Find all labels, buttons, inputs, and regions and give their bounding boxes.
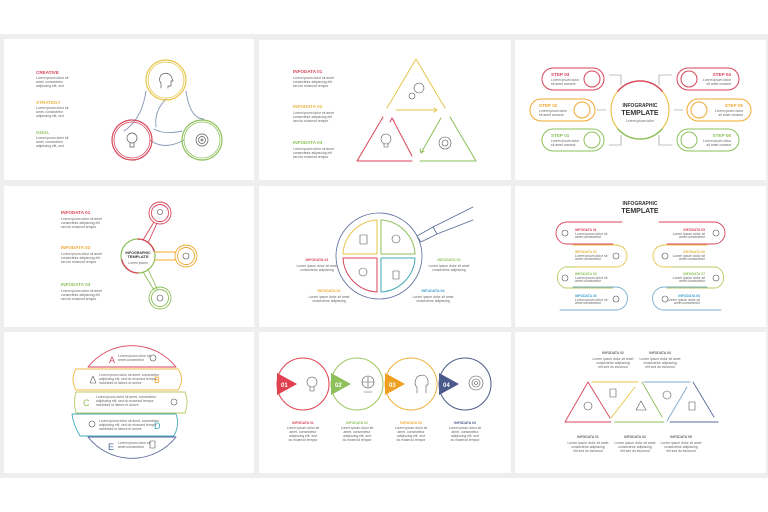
magnifier — [336, 207, 473, 299]
text: infodata 03: consectetur adipiscing elit — [293, 151, 332, 155]
band D: Lorem ipsum dolor sit amet, consectetur — [99, 419, 160, 423]
right snake: Lorem ipsum dolor sit — [668, 298, 700, 302]
labels: consectetur adipiscing — [416, 299, 450, 303]
top labels: Lorem ipsum dolor sit amet — [640, 357, 680, 361]
text: infodata 01 — [293, 69, 334, 88]
panel 5: magnifier — [259, 186, 511, 327]
step 05 — [687, 99, 751, 121]
text: infodata 01 — [61, 210, 102, 229]
text: creative: adipiscing elit, sed — [36, 84, 64, 88]
text: infodata 02: INFODATA 02 — [293, 104, 323, 109]
left snake — [556, 222, 628, 310]
band B — [73, 369, 182, 390]
step 03: do eiusmod tempor — [396, 438, 426, 442]
text: infodata 01: consectetur adipiscing elit — [293, 80, 332, 84]
bottom labels: elit sed do eiusmod — [573, 449, 603, 453]
text: infodata 03: INFODATA 03 — [293, 140, 323, 145]
central circle: Lorem ipsum dolor — [626, 119, 655, 123]
band E: Lorem ipsum dolor sit — [118, 441, 150, 445]
band C: incididunt ut labore et dolore — [96, 403, 139, 407]
step 04: Lorem ipsum dolor sit — [449, 426, 481, 430]
bottom labels: elit sed do eiusmod — [666, 449, 696, 453]
text: infodata 01: Lorem ipsum dolor sit amet — [61, 217, 102, 221]
band E: E — [108, 442, 114, 452]
bottom labels: INFODATA 01 — [577, 435, 599, 439]
step 01: Lorem ipsum dolor — [551, 139, 580, 143]
step 01: INFODATA 01 — [292, 421, 314, 425]
text: infodata 01: sed do eiusmod tempor — [293, 84, 329, 88]
connector arrows — [597, 75, 683, 145]
step 02 — [530, 99, 595, 121]
left snake: Lorem ipsum dolor sit — [575, 276, 607, 280]
bottom labels: elit sed do eiusmod — [620, 449, 650, 453]
band D — [72, 414, 178, 436]
labels: Lorem ipsum dolor sit amet — [309, 295, 349, 299]
step 02: INFODATA 02 — [346, 421, 368, 425]
top labels: consectetur adipiscing — [643, 361, 677, 365]
top labels — [593, 351, 680, 369]
hub circle: INFOGRAPHIC — [125, 251, 151, 255]
circle: target icon — [182, 120, 222, 160]
text: infodata 03: consectetur adipiscing elit — [61, 293, 100, 297]
right snake: Lorem ipsum dolor sit — [673, 254, 705, 258]
step 04: STEP 04 — [713, 72, 731, 77]
band B: adipiscing elit, sed do eiusmod tempor — [99, 377, 158, 381]
step 04: INFODATA 04 — [454, 421, 476, 425]
band A: A — [109, 355, 115, 365]
left snake: amet consectetur — [575, 279, 602, 283]
text: infodata 01: INFODATA 01 — [61, 210, 91, 215]
labels — [297, 258, 469, 303]
band A: amet consectetur — [118, 358, 145, 362]
step 03: 03 — [389, 383, 396, 389]
band C — [74, 392, 187, 413]
text: goal — [36, 130, 68, 148]
step 02: STEP 02 — [539, 103, 558, 108]
band C: adipiscing elit, sed do eiusmod tempor — [96, 399, 155, 403]
text: infodata 03: sed do eiusmod tempor — [293, 155, 329, 159]
step 01: do eiusmod tempor — [288, 438, 318, 442]
step 02: do eiusmod tempor — [342, 438, 372, 442]
band E: amet consectetur — [118, 445, 145, 449]
band D: adipiscing elit, sed do eiusmod tempor — [99, 423, 158, 427]
triangle top — [387, 59, 445, 112]
band C: C — [83, 398, 90, 408]
text: infodata 03: Lorem ipsum dolor sit amet — [293, 147, 334, 151]
left snake: INFODATA 02 — [575, 250, 597, 254]
labels: INFODATA 04 — [422, 289, 444, 293]
step 03: Lorem ipsum dolor — [551, 78, 580, 82]
text: infodata 03: INFODATA 03 — [61, 282, 91, 287]
triangle bottom left — [357, 117, 412, 161]
left snake: INFODATA 01 — [575, 228, 597, 232]
text: creative — [36, 70, 68, 88]
triangles — [565, 382, 718, 422]
text: goal: Lorem ipsum dolor sit — [36, 136, 68, 140]
text: creative: amet, consectetur — [36, 80, 64, 84]
text: creative: Lorem ipsum dolor sit — [36, 76, 68, 80]
step 06: STEP 06 — [713, 133, 731, 138]
right snake: amet consectetur — [679, 257, 706, 261]
step 04: sit amet consect — [706, 82, 731, 86]
text: infodata 03: sed do eiusmod tempor — [61, 297, 97, 301]
step 04: amet, consectetur — [452, 430, 479, 434]
panel 7: circle bands A-E — [4, 332, 254, 473]
step 01: sit amet consect — [551, 143, 576, 147]
panel 1: three circles — [4, 39, 254, 180]
text: goal: GOAL — [36, 130, 49, 135]
step 03: INFODATA 03 — [400, 421, 422, 425]
step 02: sit amet consect — [539, 113, 564, 117]
step 02: 02 — [335, 383, 342, 389]
band C: Lorem ipsum dolor sit amet, consectetur — [96, 395, 157, 399]
left snake: Lorem ipsum dolor sit — [575, 254, 607, 258]
band B: incididunt ut labore et dolore — [99, 381, 142, 385]
panel 8: four circles — [259, 332, 511, 473]
labels: consectetur adipiscing — [300, 268, 334, 272]
step 02: amet, consectetur — [344, 430, 371, 434]
step 02 — [331, 358, 383, 442]
panel 4: hub with satellites — [4, 186, 254, 327]
text: infodata 03: Lorem ipsum dolor sit amet — [61, 289, 102, 293]
labels: consectetur adipiscing — [312, 299, 346, 303]
step 04 — [439, 358, 491, 442]
central circle: INFOGRAPHIC — [622, 103, 658, 109]
right snake — [652, 222, 725, 310]
left snake: amet consectetur — [575, 235, 602, 239]
step 03: amet, consectetur — [398, 430, 425, 434]
satellite bottom — [143, 269, 171, 309]
panel 9: triangle row — [515, 332, 766, 473]
right snake: INFODATA 08 — [678, 294, 700, 298]
step 03 — [542, 68, 604, 90]
step 04 — [677, 68, 739, 90]
bottom labels: consectetur adipiscing — [571, 445, 605, 449]
bottom labels: INFODATA 03 — [624, 435, 646, 439]
step 01: 01 — [281, 383, 288, 389]
panel 6: snake list — [515, 186, 766, 327]
labels: INFODATA 01 — [306, 258, 328, 262]
text: strategy: adipiscing elit, sed — [36, 114, 64, 118]
step 04: Lorem ipsum dolor — [703, 78, 732, 82]
text: creative: CREATIVE — [36, 70, 59, 75]
left snake: amet consectetur — [575, 257, 602, 261]
text: goal: adipiscing elit, sed — [36, 144, 64, 148]
text: infodata 03 — [293, 140, 334, 159]
step 04: do eiusmod tempor — [450, 438, 480, 442]
bottom labels — [568, 435, 701, 453]
step 01: adipiscing elit, sed — [289, 434, 317, 438]
step 04: adipiscing elit, sed — [451, 434, 479, 438]
text: infodata 02: sed do eiusmod tempor — [293, 119, 329, 123]
left snake: Lorem ipsum dolor sit — [575, 232, 607, 236]
quadrants — [343, 220, 415, 292]
circle: bulb icon — [112, 120, 152, 160]
right snake: Lorem ipsum dolor sit — [673, 276, 705, 280]
band D: incididunt ut labore et dolore — [99, 427, 142, 431]
hub circle — [121, 239, 155, 273]
connecting curves — [124, 91, 204, 146]
step 01 — [542, 129, 604, 151]
labels: INFODATA 03 — [438, 258, 460, 262]
step 02: Lorem ipsum dolor — [539, 109, 568, 113]
circle: head icon — [146, 60, 186, 100]
text: goal: amet, consectetur — [36, 140, 64, 144]
text: strategy: STRATEGY — [36, 100, 61, 105]
top labels: Lorem ipsum dolor sit amet — [593, 357, 633, 361]
top labels: consectetur adipiscing — [596, 361, 630, 365]
band B: Lorem ipsum dolor sit amet, consectetur — [99, 373, 160, 377]
step 03: adipiscing elit, sed — [397, 434, 425, 438]
title — [621, 201, 659, 215]
text: infodata 03 — [61, 282, 102, 301]
band B: B — [154, 375, 160, 385]
top labels: INFODATA 02 — [602, 351, 624, 355]
panel 2: triangles — [259, 40, 511, 180]
step 04: 04 — [443, 383, 450, 389]
right snake: amet consectetur — [674, 301, 701, 305]
labels: INFODATA 02 — [318, 289, 340, 293]
labels: consectetur adipiscing — [432, 268, 466, 272]
text: infodata 01: Lorem ipsum dolor sit amet — [293, 76, 334, 80]
text: infodata 02: sed do eiusmod tempor — [61, 260, 97, 264]
right snake: amet consectetur — [679, 235, 706, 239]
text: strategy — [36, 100, 68, 118]
hub circle: TEMPLATE — [127, 254, 149, 259]
left snake: INFODATA 04 — [575, 294, 597, 298]
text: infodata 02: Lorem ipsum dolor sit amet — [293, 111, 334, 115]
left snake: Lorem ipsum dolor sit — [575, 298, 607, 302]
central circle — [611, 81, 669, 139]
band A — [88, 346, 176, 367]
step 03 — [385, 358, 437, 442]
step 02: Lorem ipsum dolor sit — [341, 426, 373, 430]
text: infodata 02: INFODATA 02 — [61, 245, 91, 250]
hub circle: Lorem ipsum — [128, 261, 148, 265]
text: infodata 01: INFODATA 01 — [293, 69, 323, 74]
labels: Lorem ipsum dolor sit amet — [429, 264, 469, 268]
text: infodata 02 — [293, 104, 334, 123]
left snake: INFODATA 03 — [575, 272, 597, 276]
title: INFOGRAPHIC — [622, 201, 658, 207]
right snake: INFODATA 06 — [683, 250, 705, 254]
right snake: INFODATA 07 — [683, 272, 705, 276]
top labels: elit sed do eiusmod — [598, 365, 628, 369]
step 02: adipiscing elit, sed — [343, 434, 371, 438]
text: infodata 02: consectetur adipiscing elit — [61, 256, 100, 260]
triangle bottom right — [420, 117, 476, 161]
step 06: sit amet consect — [706, 143, 731, 147]
right snake: INFODATA 05 — [683, 228, 705, 232]
text: strategy: Lorem ipsum dolor sit — [36, 106, 68, 110]
bottom labels: Lorem ipsum dolor sit amet — [568, 441, 608, 445]
labels: Lorem ipsum dolor sit amet — [297, 264, 337, 268]
step 01: STEP 01 — [551, 133, 570, 138]
step 01 — [277, 358, 329, 442]
text: infodata 01: consectetur adipiscing elit — [61, 221, 100, 225]
text: infodata 02: Lorem ipsum dolor sit amet — [61, 252, 102, 256]
band A: Lorem ipsum dolor sit — [118, 354, 150, 358]
central circle: TEMPLATE — [621, 110, 659, 117]
band E — [88, 437, 176, 458]
satellite right — [155, 245, 197, 267]
step 03: Lorem ipsum dolor sit — [395, 426, 427, 430]
title: TEMPLATE — [621, 208, 659, 215]
bottom labels: Lorem ipsum dolor sit amet — [661, 441, 701, 445]
top labels: elit sed do eiusmod — [645, 365, 675, 369]
step 06 — [677, 129, 739, 151]
satellite top — [143, 202, 171, 243]
bottom labels: Lorem ipsum dolor sit amet — [615, 441, 655, 445]
band D: D — [154, 421, 161, 431]
bottom labels: consectetur adipiscing — [664, 445, 698, 449]
panel 3: steps around circle — [515, 40, 766, 180]
right snake: Lorem ipsum dolor sit — [673, 232, 705, 236]
text: infodata 01: sed do eiusmod tempor — [61, 225, 97, 229]
text: infodata 02: consectetur adipiscing elit — [293, 115, 332, 119]
text: strategy: amet, consectetur — [36, 110, 64, 114]
top labels: INFODATA 04 — [649, 351, 671, 355]
bottom labels: INFODATA 05 — [670, 435, 692, 439]
text: infodata 02 — [61, 245, 102, 264]
step 05: sit amet consect — [718, 113, 743, 117]
bottom labels: consectetur adipiscing — [618, 445, 652, 449]
right snake: amet consectetur — [679, 279, 706, 283]
step 01: Lorem ipsum dolor sit — [287, 426, 319, 430]
step 01: amet, consectetur — [290, 430, 317, 434]
step 06: Lorem ipsum dolor — [703, 139, 732, 143]
labels: Lorem ipsum dolor sit amet — [413, 295, 453, 299]
step 03: STEP 03 — [551, 72, 570, 77]
step 03: sit amet consect — [551, 82, 576, 86]
step 05: Lorem ipsum dolor — [715, 109, 744, 113]
left snake: amet consectetur — [575, 301, 602, 305]
step 05: STEP 05 — [725, 103, 743, 108]
